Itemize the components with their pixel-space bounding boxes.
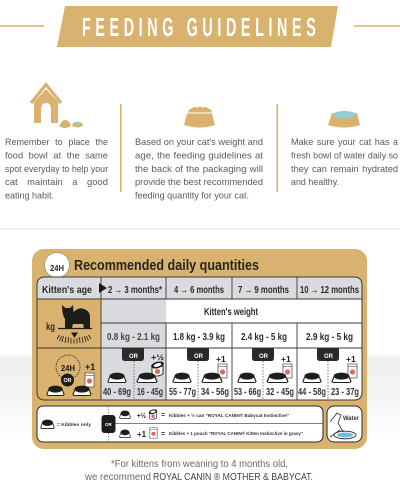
legend: Kibbles + ½ can "ROYAL CANIN® Babycat Instinctive" (169, 412, 289, 418)
weight row: 2.9 kg - 5 kg (306, 331, 353, 343)
icon: kibble bowl (184, 107, 215, 128)
icon: house with bowls (31, 84, 83, 128)
text: bowl placement: Remember to place the (5, 137, 108, 148)
gram values: 34 - 56g (201, 386, 229, 398)
text: fresh water: Make sure your cat has a (291, 137, 399, 148)
weight row: 1.8 kg - 3.9 kg (173, 331, 225, 343)
weight header: Kitten's weight (204, 306, 258, 318)
divider left (120, 104, 122, 192)
legend: +1 (137, 430, 147, 439)
text: bowl placement: eating habit. (5, 190, 54, 202)
title banner: FEEDING GUIDELINES (82, 14, 316, 42)
bowls and wet food icons: +½ (151, 352, 164, 362)
icon: water cat (327, 406, 362, 442)
age row (42, 283, 359, 296)
bowls and wet food icons: +1 (346, 354, 356, 364)
age row: Kitten's age (42, 284, 92, 296)
footnote: ROYAL CANIN ® MOTHER & BABYCAT. (153, 471, 313, 483)
heading: Recommended daily quantities (74, 258, 259, 274)
title banner (0, 6, 400, 47)
text: bowl placement: spot everyday to help your (5, 164, 108, 175)
text: fresh water: and healthy. (291, 177, 339, 188)
weight row: 0.8 kg - 2.1 kg (107, 331, 160, 343)
text: bowl placement (5, 137, 108, 202)
text: bowl placement: cat maintain a good (5, 177, 108, 188)
legend: = (161, 412, 165, 419)
icon: 24h plus one pouch (47, 355, 95, 396)
age row: 7 → 9 months (238, 284, 289, 296)
text: feeding guidelines: age, the feeding guidelines at (135, 150, 263, 162)
legend (37, 406, 323, 442)
legend: Kibbles + 1 pouch "ROYAL CANIN® Kitten Instinctive in gravy" (169, 430, 303, 436)
icon: kitten on scale: kg (46, 322, 55, 333)
OR dividers: OR (259, 354, 269, 360)
legend: = Kibbles only (57, 422, 91, 427)
footnote: *For kittens from weaning to 4 months old, (111, 458, 288, 470)
weight row (107, 331, 353, 343)
gram values: 55 - 77g (169, 386, 196, 398)
section divider and grey backdrop (0, 228, 400, 444)
icon: 24h clock badge: 24H (50, 264, 64, 273)
gram values: 32 - 45g (266, 386, 294, 398)
text: fresh water: they can remain hydrated (291, 164, 398, 175)
age row: 10 → 12 months (300, 284, 359, 296)
OR dividers: OR (324, 354, 334, 360)
table: quantities by age (37, 277, 362, 400)
text: feeding guidelines: provide the best recommended (135, 177, 263, 188)
gram values: 44 - 58g (298, 386, 326, 398)
icon: 24h plus one pouch: +1 (85, 362, 95, 372)
panel: recommended daily quantities (32, 249, 367, 449)
text: feeding guidelines (135, 137, 263, 202)
text: feeding guidelines: Based on your cat's weight and (135, 137, 263, 148)
legend: = (161, 431, 165, 438)
text: feeding guidelines: the back of the packaging will (135, 164, 263, 175)
legend: +½ (137, 412, 146, 420)
gram values: 40 - 69g (103, 386, 131, 398)
gram values: 16 - 45g (137, 386, 163, 398)
icon: water bowl (328, 111, 360, 128)
bowls and wet food icons: +1 (281, 354, 291, 364)
icon: 24h clock badge (44, 252, 70, 278)
divider right (276, 104, 278, 192)
bowls and wet food icons: +1 (216, 354, 226, 364)
icon: 24h plus one pouch: 24H (61, 364, 75, 373)
gram values (103, 386, 359, 398)
icon: water cat: Water (343, 416, 360, 422)
weight row: 2.4 kg - 5 kg (241, 331, 287, 343)
footnote: we recommend (84, 471, 151, 483)
OR dividers (122, 348, 339, 400)
footnote (84, 458, 313, 483)
bowls and wet food icons (108, 352, 357, 383)
age row: 4 → 6 months (174, 284, 224, 296)
text: bowl placement: food bowl at the same (5, 150, 108, 162)
icon: kitten on scale (46, 305, 92, 344)
OR dividers: OR (129, 354, 139, 360)
icon: 24h plus one pouch: OR (64, 378, 72, 384)
gram values: 53 - 66g (234, 386, 261, 398)
text: feeding guidelines: feeding quantity for your cat. (135, 190, 249, 202)
legend: OR (105, 422, 113, 427)
age row: 2 → 3 months* (108, 284, 163, 296)
gram values: 23 - 37g (331, 386, 359, 398)
OR dividers: OR (194, 354, 204, 360)
text: fresh water (291, 137, 399, 188)
